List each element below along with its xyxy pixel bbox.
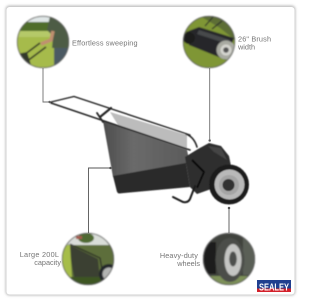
label: 26 inch brush width: 26" Brush <box>238 34 271 44</box>
sweeper handle frame <box>51 96 197 150</box>
connector: capacity callout line <box>88 167 111 233</box>
label: heavy-duty wheels: Heavy-duty <box>160 251 198 260</box>
connector: wheel callout line <box>228 207 230 233</box>
label: heavy-duty wheels: wheels <box>176 259 200 268</box>
sweeper bag dark base <box>113 163 190 194</box>
connector: handle callout line <box>43 68 50 103</box>
photo circle: effortless sweeping <box>17 16 70 68</box>
sweeper stand <box>173 186 195 202</box>
sweeper wheel <box>209 164 249 204</box>
label: large 200L capacity: Large 200L <box>20 250 59 259</box>
logo: SEALEY <box>257 280 291 294</box>
photo circle: large capacity <box>62 233 119 285</box>
sweeper collection bag mesh <box>103 121 190 177</box>
label: effortless sweeping: Effortless sweeping <box>72 38 138 48</box>
sweeper brush housing <box>185 143 231 194</box>
sweeper rear mesh <box>110 112 187 150</box>
product: lawn sweeper <box>51 96 249 204</box>
logo: SEALEY: SEALEY <box>259 282 289 294</box>
photo circle: brush width <box>183 16 236 68</box>
connector: brush callout line <box>209 68 210 141</box>
label: 26 inch brush width: width <box>237 42 255 52</box>
label: large 200L capacity: capacity <box>34 258 61 267</box>
photo circle: heavy-duty wheels <box>203 233 255 285</box>
